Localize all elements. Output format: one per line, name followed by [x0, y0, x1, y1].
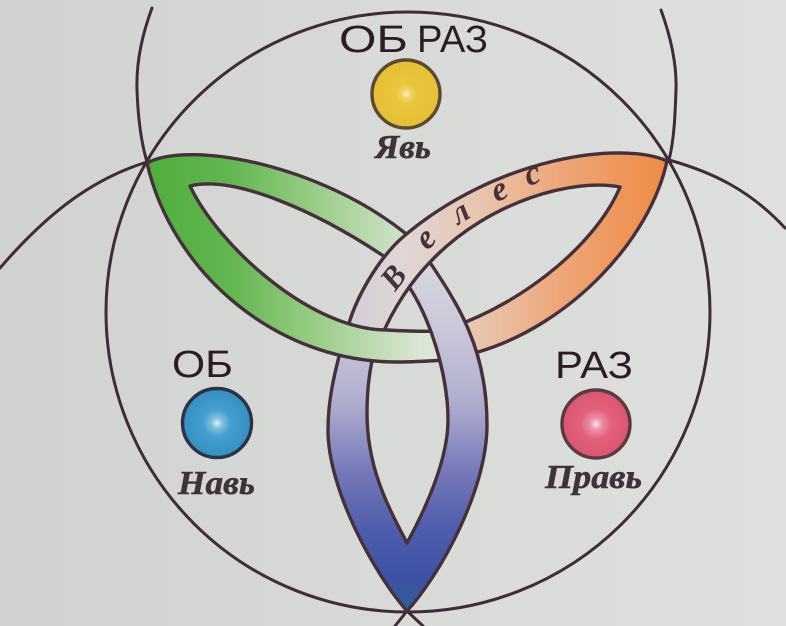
blue band crossing over the green and orange bands [415, 300, 488, 400]
orange band: Велес [345, 153, 667, 358]
label: Навь: Навь [177, 465, 255, 502]
green band [147, 155, 445, 362]
band lettering: Велес [372, 154, 545, 297]
heading: ОБ: ОБ [172, 344, 233, 386]
band lettering: Велес: В [372, 258, 414, 297]
circle: pink Правь [562, 390, 630, 458]
heading: ОБ РАЗ: РАЗ [417, 19, 488, 61]
band lettering: Велес: е [407, 220, 444, 257]
large circle [106, 12, 710, 612]
circle: blue Навь [182, 388, 252, 458]
label: Явь: Явь [374, 129, 431, 166]
heading: ОБ РАЗ: ОБ [339, 19, 408, 61]
band lettering: Велес: е [485, 170, 513, 210]
label: Правь: Правь [544, 459, 642, 496]
orange band crossing over the green and blue bands [350, 215, 440, 315]
heading: РАЗ: РАЗ [555, 345, 633, 387]
heading: ОБ РАЗ [339, 19, 488, 61]
circle: yellow Явь [372, 60, 440, 128]
band lettering: Велес: л [441, 192, 476, 232]
blue band: Навь to Правь [328, 255, 487, 611]
band lettering: Велес: с [519, 154, 545, 194]
